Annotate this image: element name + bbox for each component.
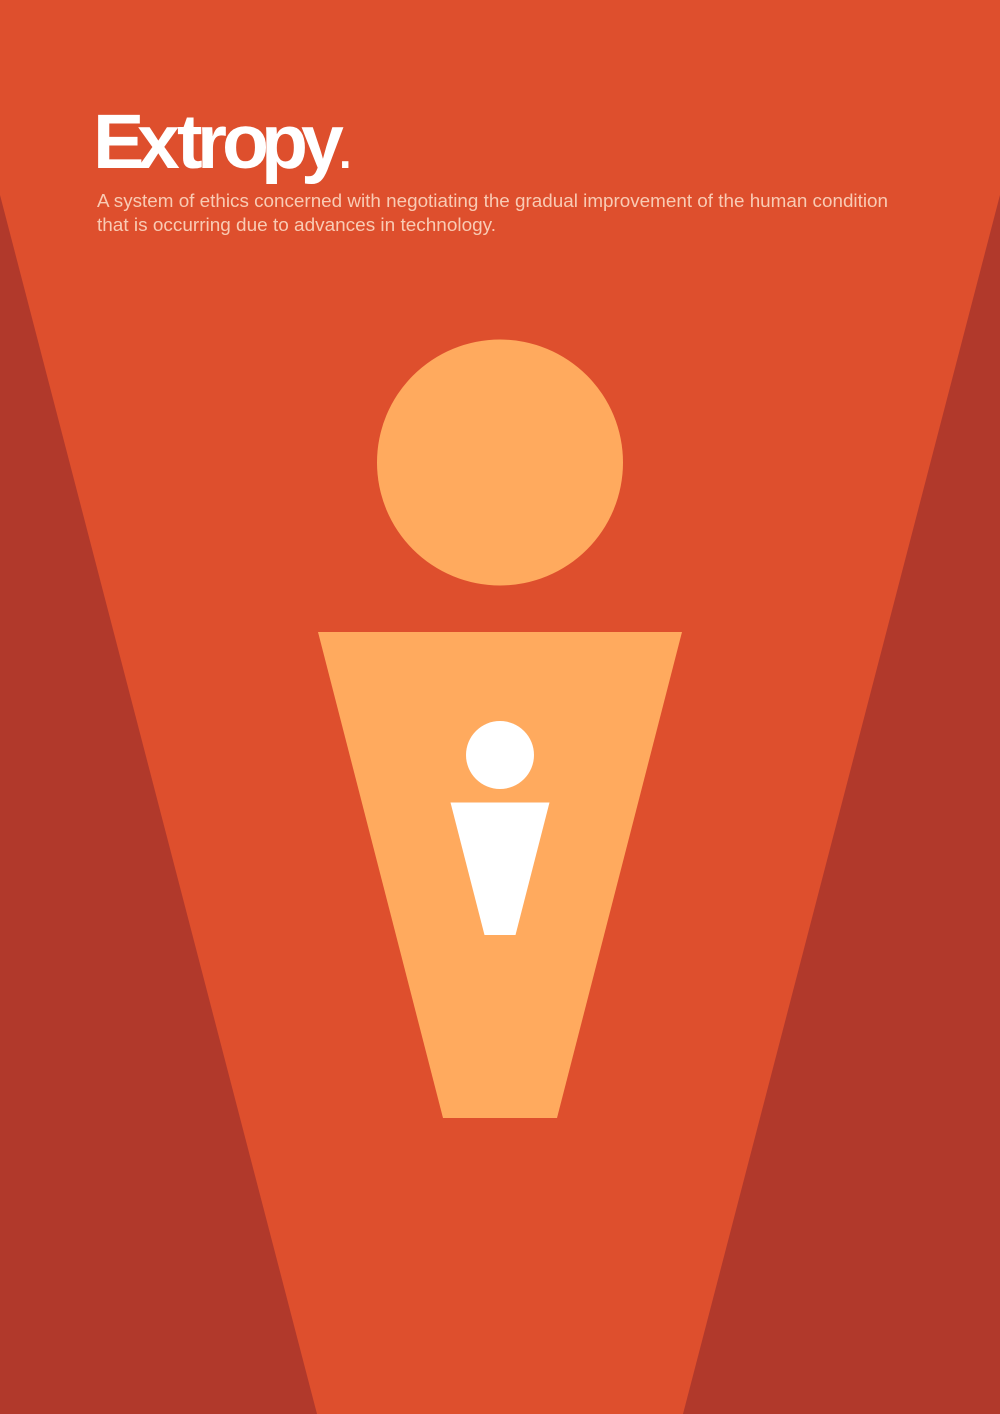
description: A system of ethics concerned with negotiating the gradual improvement of the human condition (97, 190, 888, 211)
large figure head (377, 340, 623, 586)
large figure body (318, 632, 682, 1118)
small figure head (466, 721, 534, 789)
large figure (318, 340, 682, 1118)
small figure body (450, 802, 550, 935)
title: Extropy (93, 99, 344, 185)
right dark wedge (683, 195, 1000, 1414)
small figure (450, 721, 550, 935)
description (97, 190, 888, 235)
description: that is occurring due to advances in technology. (97, 214, 496, 235)
title: . (339, 127, 352, 178)
left dark wedge (0, 195, 317, 1414)
